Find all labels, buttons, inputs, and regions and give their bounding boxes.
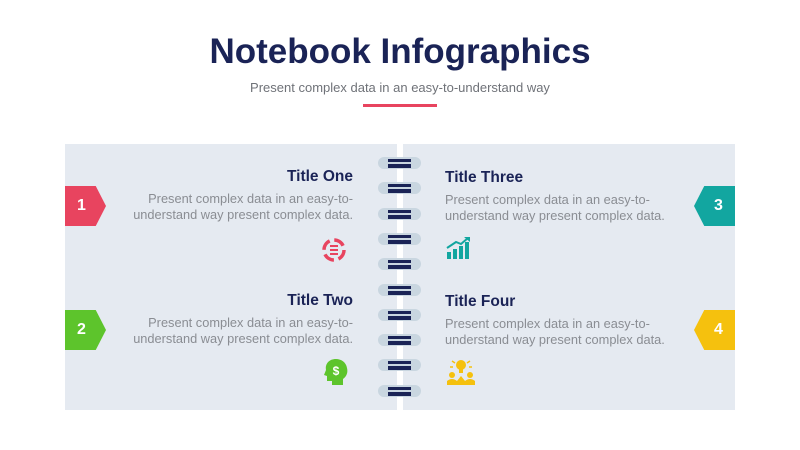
badge 3 <box>694 186 735 226</box>
badge 1 <box>65 186 106 226</box>
text block: Title Four: Title Four <box>445 293 515 310</box>
text block: Title Four: Present complex data in an easy-to- <box>445 316 650 331</box>
icon: money head: $ <box>333 364 340 378</box>
icon: growth chart <box>446 237 470 259</box>
subtitle: Present complex data in an easy-to-understand way <box>250 80 550 95</box>
text block: Title Two: Title Two <box>287 292 353 309</box>
badge 4 <box>694 310 735 350</box>
panel: left page <box>65 144 397 410</box>
text block: Title One: Present complex data in an easy-to- <box>148 191 353 206</box>
text block: Title Three <box>445 169 665 222</box>
badge 1: 1 <box>77 197 86 214</box>
text block: Title Two: Present complex data in an easy-to- <box>148 315 353 330</box>
text block: Title One: Title One <box>287 168 353 185</box>
panel: right page <box>403 144 735 410</box>
text block: Title One <box>133 168 353 222</box>
text block: Title One: understand way present complex data. <box>133 206 353 222</box>
badge 2 <box>65 310 106 350</box>
underline accent <box>363 104 437 107</box>
badge 4: 4 <box>714 321 723 338</box>
text block: Title Two: understand way present complex data. <box>133 330 353 346</box>
text block: Title Three: understand way present complex data. <box>445 208 665 222</box>
icon: money head <box>324 359 348 385</box>
text block: Title Four: understand way present complex data. <box>445 332 665 346</box>
text block: Title Three: Title Three <box>445 169 523 186</box>
text block: Title Three: Present complex data in an easy-to- <box>445 192 650 207</box>
icon: cycle <box>322 238 346 262</box>
icon: idea team <box>447 360 475 385</box>
badge 2: 2 <box>77 321 86 338</box>
text block: Title Two <box>133 292 353 346</box>
text block: Title Four <box>445 293 665 346</box>
badge 3: 3 <box>714 197 723 214</box>
title: Notebook Infographics <box>209 32 591 71</box>
